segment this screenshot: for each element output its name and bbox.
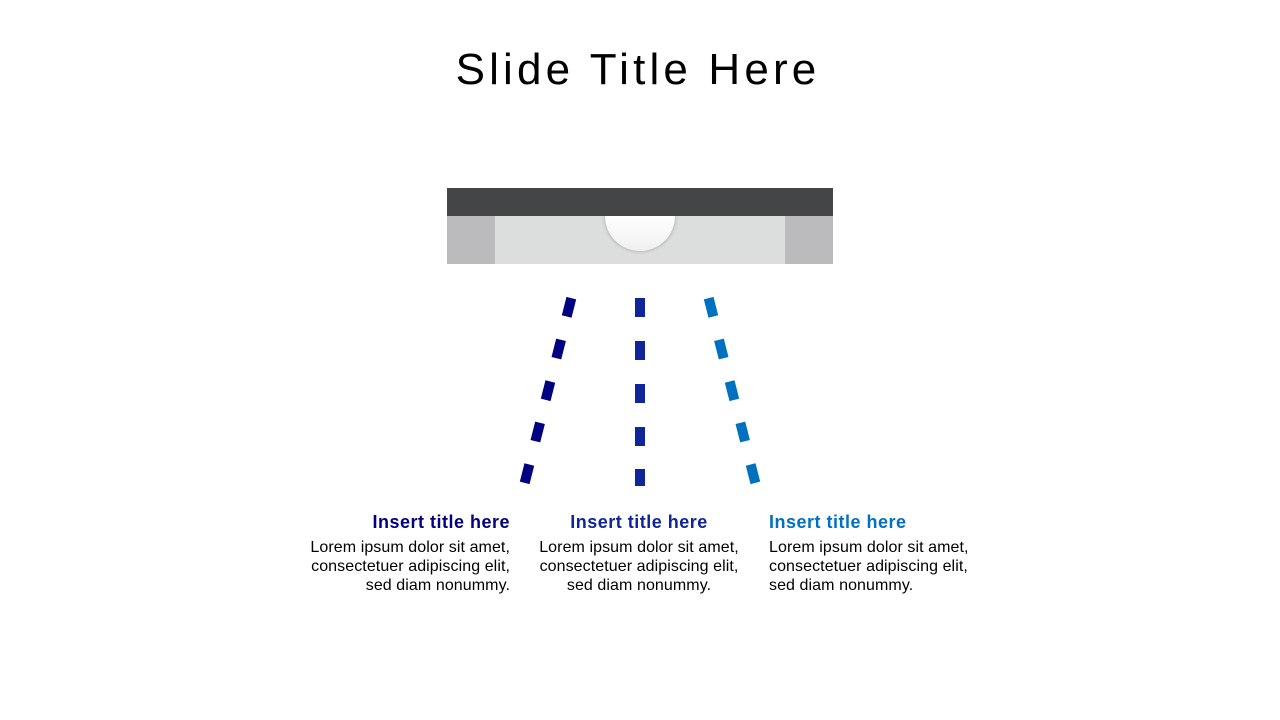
- middle body: consectetuer adipiscing elit,: [540, 558, 738, 575]
- right dashed beam: [704, 297, 760, 484]
- middle body: [539, 539, 739, 594]
- right body: [769, 539, 969, 594]
- middle body: Lorem ipsum dolor sit amet,: [539, 539, 739, 556]
- left dashed beam: [520, 297, 576, 484]
- right text block: [769, 512, 969, 594]
- left body: [310, 539, 510, 594]
- middle text block: [539, 512, 739, 594]
- left body: sed diam nonummy.: [366, 577, 510, 594]
- right heading: Insert title here: [769, 512, 907, 532]
- right body: sed diam nonummy.: [769, 577, 913, 594]
- title: Slide Title Here: [456, 45, 820, 94]
- left heading: Insert title here: [372, 512, 510, 532]
- middle body: sed diam nonummy.: [567, 577, 711, 594]
- right body: Lorem ipsum dolor sit amet,: [769, 539, 969, 556]
- left body: consectetuer adipiscing elit,: [311, 558, 510, 575]
- middle heading: Insert title here: [570, 512, 708, 532]
- left text block: [310, 512, 510, 594]
- lamp fixture: [447, 188, 833, 264]
- left body: Lorem ipsum dolor sit amet,: [310, 539, 510, 556]
- right body: consectetuer adipiscing elit,: [769, 558, 968, 575]
- middle dashed beam: [635, 298, 645, 486]
